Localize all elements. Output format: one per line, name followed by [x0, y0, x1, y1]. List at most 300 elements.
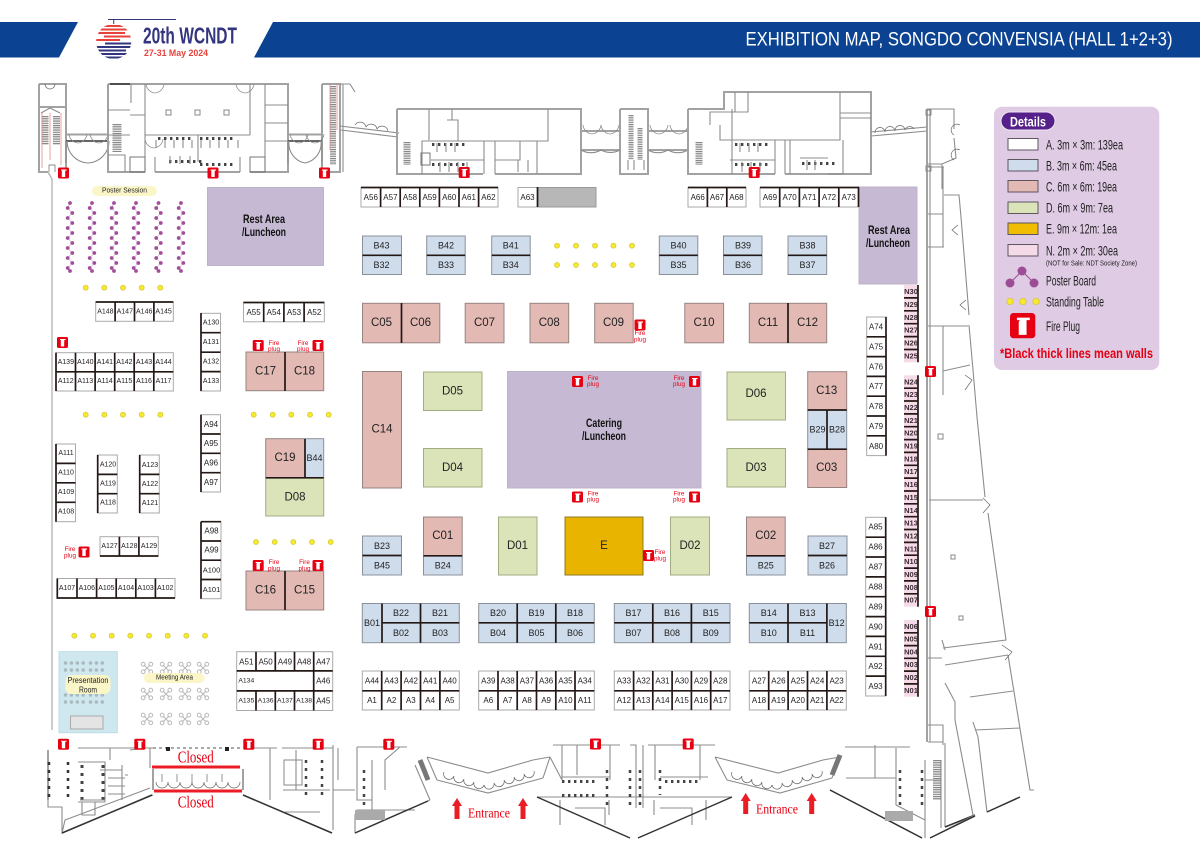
booths A44-A40 and A1-A5: A44 [365, 676, 380, 686]
booths A33-A28 and A12-A17: A17 [713, 696, 728, 705]
booths B17-B15 and B07-B09: B09 [703, 628, 719, 638]
booths B38-B37: B38 [799, 240, 816, 250]
meeting area [141, 662, 209, 725]
arrow: entrance [518, 798, 528, 819]
booths A74-A80: A79 [869, 422, 884, 431]
floor plan: central connector and tower [581, 109, 688, 174]
closed bar: top [152, 766, 240, 768]
booth C19: C19 [274, 452, 296, 464]
booths A148-A145: A148 [97, 308, 114, 316]
fire plug by C16: Fire [269, 559, 280, 566]
booths B27-B26: B26 [819, 560, 835, 570]
fire plug: catering top right: Fire [674, 375, 685, 382]
booths B29-B28: B29 [809, 424, 826, 434]
booths A94-A97 [201, 415, 220, 492]
booths N30-N25: N26 [904, 338, 918, 348]
logo: 20th WCNDT: 20th WCNDT [143, 22, 237, 48]
booth C10 [685, 303, 724, 343]
legend item: N: N. 2m × 2m: 30ea [1046, 242, 1118, 258]
booths A127-A129: A129 [141, 543, 157, 550]
booths N06-N01 [904, 620, 919, 697]
booths B17-B15 and B07-B09: B17 [625, 608, 642, 618]
entrance label: Entrance [756, 802, 798, 816]
fire plug: catering bottom right [673, 490, 700, 504]
booths C16-C15: C15 [294, 584, 315, 596]
legend item: D [1008, 200, 1113, 216]
booths B29-B28: B28 [829, 424, 845, 434]
booths N24-N07: N18 [904, 454, 918, 463]
booths B20-B18 and B04-B06: B20 [490, 608, 506, 618]
legend item: C [1008, 178, 1117, 194]
booth C09: C09 [603, 317, 624, 329]
booths N24-N07: N13 [904, 519, 918, 528]
booths A44-A40 and A1-A5 [362, 671, 459, 710]
fire plug: catering top left: plug [587, 381, 599, 388]
booths A33-A28 and A12-A17: A14 [655, 696, 670, 705]
booths B27-B26 [808, 536, 847, 575]
booth C03: C03 [816, 462, 837, 474]
booths A94-A97: A97 [204, 478, 219, 487]
booths B20-B18 and B04-B06: B06 [567, 628, 583, 638]
booths A33-A28 and A12-A17: A30 [675, 676, 689, 686]
booths B42-B33 [427, 236, 465, 274]
booths A39-A34 and A6-A11: A11 [578, 696, 592, 705]
booths A33-A28 and A12-A17 [614, 671, 730, 710]
booths A51-A47 A134 A46 A135-A138 A45: A46 [316, 676, 331, 686]
booths A39-A34 and A6-A11: A7 [503, 696, 513, 705]
meeting area: Meeting Area [156, 674, 193, 682]
booths A51-A47 A134 A46 A135-A138 A45: A49 [278, 658, 293, 666]
fire plug left [57, 337, 68, 348]
booths B14 B13 B12 B10 B11: B12 [829, 618, 845, 628]
booths A66-A68: A66 [691, 193, 705, 202]
booths B01 B22 B21 B02 B03: B02 [393, 628, 409, 638]
booths A51-A47 A134 A46 A135-A138 A45: A48 [297, 658, 312, 666]
booth A63 and grey block [518, 187, 596, 207]
booth E [565, 517, 643, 575]
booths A51-A47 A134 A46 A135-A138 A45: A135 [238, 698, 254, 704]
booths A33-A28 and A12-A17: A12 [617, 696, 632, 705]
booths C05-C06: C06 [410, 317, 431, 329]
booths A85-A93: A85 [868, 522, 883, 532]
booths A139-A144 and A112-A117: A140 [77, 359, 94, 366]
booth C13: C13 [816, 385, 837, 397]
booths N24-N07: N07 [904, 596, 918, 605]
booths C05-C06: C05 [371, 317, 392, 329]
booths A148-A145: A145 [155, 308, 172, 316]
fire plug by C15: Fire [299, 559, 310, 566]
booths C17-C18 [246, 352, 324, 391]
floor plan: bottom centre building [537, 745, 732, 838]
booths B43-B32: B43 [373, 240, 390, 250]
booths B41-B34 [492, 236, 530, 274]
poster session label: Poster Session [102, 188, 147, 194]
rest area right: /Luncheon [866, 236, 910, 250]
booths C19 B44 D08 [266, 439, 324, 516]
booths B17-B15 and B07-B09 [614, 604, 730, 643]
booths A98-A101: A100 [203, 566, 220, 574]
booth C14 [362, 372, 402, 488]
fire plug by C09: plug [634, 336, 646, 344]
booths A85-A93: A88 [868, 582, 883, 592]
closed label: bottom: Closed [178, 792, 214, 812]
booths A27-A23 and A18-A22: A27 [752, 676, 767, 686]
rest area right [859, 187, 917, 284]
booths A107-A102: A102 [157, 585, 173, 592]
standing tables: middle rows [251, 412, 333, 544]
booths A98-A101: A98 [204, 526, 219, 536]
header band: right with title [254, 22, 1200, 58]
booths N24-N07: N08 [904, 583, 918, 592]
booths A66-A68: A68 [729, 193, 744, 202]
booths A111-A108 [56, 444, 76, 522]
booths B40-B35: B35 [670, 260, 687, 270]
booths A69-A73 [760, 187, 859, 207]
booths N24-N07: N22 [904, 403, 918, 412]
booths B39-B36: B39 [735, 240, 751, 250]
fire plug: catering bottom right: plug [673, 496, 685, 504]
booths A69-A73: A70 [782, 193, 797, 202]
booths N24-N07: N17 [904, 467, 918, 476]
booths A39-A34 and A6-A11: A8 [522, 696, 532, 705]
booths B01 B22 B21 B02 B03 [362, 604, 459, 643]
arrow: entrance [741, 793, 751, 814]
arrow: entrance [452, 798, 462, 819]
booths A39-A34 and A6-A11 [479, 671, 594, 710]
poster boards [66, 201, 185, 273]
booths A85-A93 [866, 517, 886, 696]
booths A33-A28 and A12-A17: A29 [694, 676, 709, 686]
booths A44-A40 and A1-A5: A1 [367, 696, 377, 705]
booths A74-A80: A74 [869, 322, 884, 332]
booths A123-A121: A123 [142, 462, 158, 469]
booths B43-B32: B32 [373, 260, 390, 270]
booths A130-A133: A131 [203, 339, 219, 346]
booths A107-A102: A106 [79, 585, 95, 592]
booths B14 B13 B12 B10 B11: B10 [761, 628, 777, 638]
fire plug: catering bottom left: Fire [588, 490, 599, 498]
booths B17-B15 and B07-B09: B07 [625, 628, 642, 638]
booths N24-N07: N19 [904, 442, 918, 450]
legend item: E: E. 9m × 12m: 1ea [1046, 220, 1117, 236]
booth D05 [424, 372, 482, 410]
booths N30-N25: N25 [904, 352, 918, 360]
booths A33-A28 and A12-A17: A28 [713, 676, 728, 686]
booths A139-A144 and A112-A117: A117 [156, 378, 172, 385]
booth C01: C01 [432, 530, 453, 542]
legend item: A [1008, 136, 1123, 152]
booths B20-B18 and B04-B06: B19 [528, 608, 545, 618]
booths A39-A34 and A6-A11: A39 [481, 676, 496, 686]
booths A27-A23 and A18-A22: A19 [771, 696, 786, 705]
booths A85-A93: A86 [868, 542, 883, 552]
legend item: poster board [1006, 266, 1096, 288]
booths B14 B13 B12 B10 B11: B11 [800, 628, 815, 638]
booths A69-A73: A71 [802, 193, 817, 202]
booths A56-A62: A60 [442, 193, 457, 202]
booths A39-A34 and A6-A11: A10 [558, 696, 573, 705]
booths A56-A62: A61 [462, 193, 476, 202]
booths A33-A28 and A12-A17: A33 [617, 676, 632, 686]
booths A74-A80: A78 [869, 402, 884, 411]
legend note: walls: *Black thick lines mean walls [1000, 345, 1153, 361]
booths A27-A23 and A18-A22: A21 [810, 696, 825, 705]
booths N06-N01: N05 [904, 635, 918, 644]
booths N24-N07: N14 [904, 506, 919, 515]
booths B17-B15 and B07-B09: B15 [703, 608, 719, 618]
booth A63 and grey block: A63 [520, 193, 535, 202]
booths A111-A108: A109 [58, 489, 74, 496]
fire plug by C18 [297, 340, 324, 353]
booths A94-A97: A95 [204, 439, 219, 448]
booth D06 [727, 372, 786, 420]
booths C01-B24 [424, 517, 462, 575]
presentation room: Presentation [68, 676, 108, 685]
floor plan: bottom right building [830, 745, 975, 838]
booths A130-A133: A132 [203, 358, 219, 366]
booths A66-A68: A67 [710, 193, 725, 202]
booths A148-A145: A147 [117, 308, 133, 316]
booths A51-A47 A134 A46 A135-A138 A45 [237, 652, 333, 710]
booths N24-N07 [904, 375, 919, 607]
booths N24-N07: N09 [904, 570, 918, 579]
booths N24-N07: N23 [904, 390, 918, 399]
booths B41-B34: B34 [503, 260, 519, 270]
booths C17-C18: C18 [294, 366, 315, 378]
booths A107-A102 [57, 578, 175, 598]
fire plug: catering top right [673, 375, 700, 388]
booth D04 [424, 448, 482, 487]
booth D02 [670, 517, 710, 575]
booth D05: D05 [442, 386, 463, 398]
booths A123-A121 [140, 455, 159, 513]
booths A44-A40 and A1-A5: A3 [406, 696, 416, 705]
booths C16-C15 [246, 571, 324, 610]
booths A51-A47 A134 A46 A135-A138 A45: A45 [316, 696, 331, 706]
booths N24-N07: N15 [904, 493, 918, 502]
booths A85-A93: A93 [868, 682, 883, 691]
booths A27-A23 and A18-A22: A23 [829, 676, 844, 686]
booths N30-N25: N30 [904, 287, 918, 296]
fire plug: catering bottom right: Fire [674, 490, 685, 498]
fire plug by E: plug [654, 556, 666, 562]
catering / luncheon area [508, 372, 701, 488]
floor plan: entrance hall left [427, 757, 550, 820]
fire plugs on floor-plan perimeter [58, 167, 936, 750]
legend panel: details [994, 107, 1159, 370]
legend item: poster board: Poster Board [1046, 272, 1096, 288]
booths A55-A52: A52 [307, 308, 322, 317]
legend item: B: B. 3m × 6m: 45ea [1046, 158, 1117, 174]
fire plug by A127: plug [64, 552, 76, 560]
booths N06-N01: N01 [904, 686, 918, 695]
booths A27-A23 and A18-A22: A26 [771, 676, 786, 686]
booth D06: D06 [745, 388, 767, 400]
booths A39-A34 and A6-A11: A34 [578, 676, 592, 686]
fire plug by C18: plug [297, 346, 309, 353]
closed label: top: Closed [178, 748, 214, 766]
rest area right: Rest Area [868, 223, 910, 237]
booths A107-A102: A107 [59, 585, 75, 592]
booths N24-N07: N16 [904, 480, 918, 489]
booths N06-N01: N04 [904, 648, 919, 656]
booths B23-B45: B23 [374, 541, 390, 551]
booths B42-B33: B42 [438, 240, 454, 250]
booths A98-A101: A99 [204, 546, 219, 554]
standing tables: top centre [554, 243, 634, 268]
booths C17-C18: C17 [255, 366, 276, 378]
booths A27-A23 and A18-A22 [749, 671, 846, 710]
booths C02-B25 [746, 517, 785, 575]
booths A74-A80: A80 [869, 442, 884, 451]
booths A139-A144 and A112-A117 [56, 353, 173, 391]
booths B20-B18 and B04-B06: B18 [567, 608, 583, 618]
booths A44-A40 and A1-A5: A42 [404, 676, 418, 686]
legend item: B [1008, 158, 1117, 174]
booths A39-A34 and A6-A11: A36 [539, 676, 554, 686]
booth C02: C02 [755, 530, 776, 542]
booths B42-B33: B33 [438, 260, 454, 270]
floor plan: main left building [108, 84, 288, 172]
booth D01 [498, 517, 537, 575]
booths A39-A34 and A6-A11: A35 [558, 676, 573, 686]
booths A56-A62 [361, 187, 498, 207]
booths A139-A144 and A112-A117: A141 [97, 359, 113, 366]
booths B29-B28 [808, 410, 847, 449]
booths A85-A93: A91 [868, 642, 883, 652]
booths A55-A52: A53 [287, 308, 302, 317]
booths A148-A145 [96, 302, 173, 321]
booths B40-B35: B40 [670, 240, 687, 250]
fire plug: catering top left [572, 375, 599, 388]
booths N24-N07: N11 [904, 544, 918, 553]
floor plan: centre-right building [688, 92, 927, 174]
booth C10: C10 [693, 317, 715, 329]
booth B25: B25 [758, 560, 774, 570]
fire plug: catering top left: Fire [588, 375, 599, 382]
booths B41-B34: B41 [503, 240, 519, 250]
booths A55-A52: A55 [246, 308, 261, 317]
booth C08 [530, 303, 569, 343]
booths A120-A118: A118 [100, 500, 116, 506]
booths A51-A47 A134 A46 A135-A138 A45: A137 [277, 698, 293, 704]
booths A111-A108: A110 [58, 470, 74, 476]
fire plug by C17: Fire [269, 340, 280, 347]
booths N30-N25: N28 [904, 313, 918, 322]
booths A51-A47 A134 A46 A135-A138 A45: A47 [316, 658, 331, 666]
presentation room: Room [79, 686, 97, 694]
booths A139-A144 and A112-A117: A114 [97, 378, 113, 385]
booths A33-A28 and A12-A17: A15 [675, 696, 689, 705]
booths N24-N07: N10 [904, 557, 918, 566]
booths C11-C12 [749, 303, 827, 343]
booths A33-A28 and A12-A17: A31 [655, 676, 670, 686]
standing tables: bottom row [72, 633, 208, 638]
booth D02: D02 [679, 540, 701, 552]
booths C13 B29 B28 C03 [808, 372, 847, 488]
fire plug: catering top right: plug [673, 381, 685, 388]
booths A69-A73: A72 [822, 193, 837, 202]
booths C16-C15: C16 [255, 584, 276, 596]
booths B39-B36 [724, 236, 762, 274]
booths A51-A47 A134 A46 A135-A138 A45: A50 [258, 658, 273, 666]
booths C11-C12: C12 [797, 317, 818, 329]
arrow: entrance [807, 793, 817, 814]
header band: left [0, 22, 78, 58]
fire plug by A127 [64, 546, 90, 560]
booth C07 [465, 303, 504, 343]
standing tables: left rows [83, 285, 163, 417]
booths A39-A34 and A6-A11: A9 [541, 696, 552, 705]
booths B01 B22 B21 B02 B03: B01 [364, 618, 380, 628]
logo: 20th WCNDT: 27-31 May 2024 [144, 48, 209, 59]
booths A74-A80 [867, 317, 886, 456]
booths A27-A23 and A18-A22: A25 [791, 676, 805, 686]
booths A39-A34 and A6-A11: A37 [520, 676, 535, 686]
booth D03: D03 [745, 462, 767, 474]
fire plug by C15: plug [299, 566, 311, 572]
legend item: E [1008, 220, 1117, 236]
booths A120-A118 [98, 455, 117, 513]
booths A39-A34 and A6-A11: A38 [500, 676, 515, 686]
booths A139-A144 and A112-A117: A116 [136, 378, 152, 385]
presentation room [59, 652, 117, 733]
booths A85-A93: A87 [868, 562, 883, 572]
legend item: C: C. 6m × 6m: 19ea [1046, 178, 1117, 194]
booths B14 B13 B12 B10 B11: B14 [761, 608, 777, 618]
booths A66-A68 [688, 187, 746, 207]
booths B01 B22 B21 B02 B03: B03 [432, 628, 448, 638]
booths B43-B32 [362, 236, 402, 274]
booths A98-A101 [201, 522, 221, 599]
booths B20-B18 and B04-B06: B05 [528, 628, 545, 638]
booths A39-A34 and A6-A11: A6 [483, 696, 494, 705]
booths B40-B35 [659, 236, 698, 274]
booths A130-A133 [201, 313, 220, 391]
booths B20-B18 and B04-B06 [479, 604, 594, 643]
booths A139-A144 and A112-A117: A113 [77, 378, 93, 385]
booths N24-N07: N20 [904, 429, 918, 438]
booths A74-A80: A75 [869, 342, 884, 352]
booths A55-A52 [244, 302, 324, 322]
booths B27-B26: B27 [819, 541, 835, 551]
booths C05-C06 [362, 303, 440, 343]
booths A44-A40 and A1-A5: A2 [387, 696, 397, 705]
floor plan: second connector and tower [288, 84, 399, 172]
booth C09 [595, 303, 633, 343]
booth B24: B24 [435, 560, 451, 570]
booths N24-N07: N24 [904, 377, 919, 386]
booths A51-A47 A134 A46 A135-A138 A45: A51 [239, 658, 254, 666]
fire plug by C18: Fire [298, 340, 309, 347]
fire plug by C16 [253, 559, 280, 572]
poster session label [92, 186, 157, 196]
booths A85-A93: A90 [868, 622, 883, 632]
booths N06-N01: N06 [904, 622, 918, 631]
booths A74-A80: A77 [869, 382, 884, 391]
booth C08: C08 [539, 317, 560, 329]
booth D01: D01 [507, 540, 528, 552]
fire plug by C17 [253, 340, 280, 353]
floor plan: bottom-left building [48, 748, 153, 833]
booths B23-B45 [362, 536, 402, 575]
floor plan: bottom third building [338, 747, 430, 833]
booths A27-A23 and A18-A22: A22 [829, 696, 844, 705]
legend item: N [1008, 242, 1137, 268]
booths A139-A144 and A112-A117: A112 [58, 378, 74, 385]
booths A33-A28 and A12-A17: A13 [636, 696, 651, 705]
floor plan: entrance hall right [715, 757, 840, 816]
